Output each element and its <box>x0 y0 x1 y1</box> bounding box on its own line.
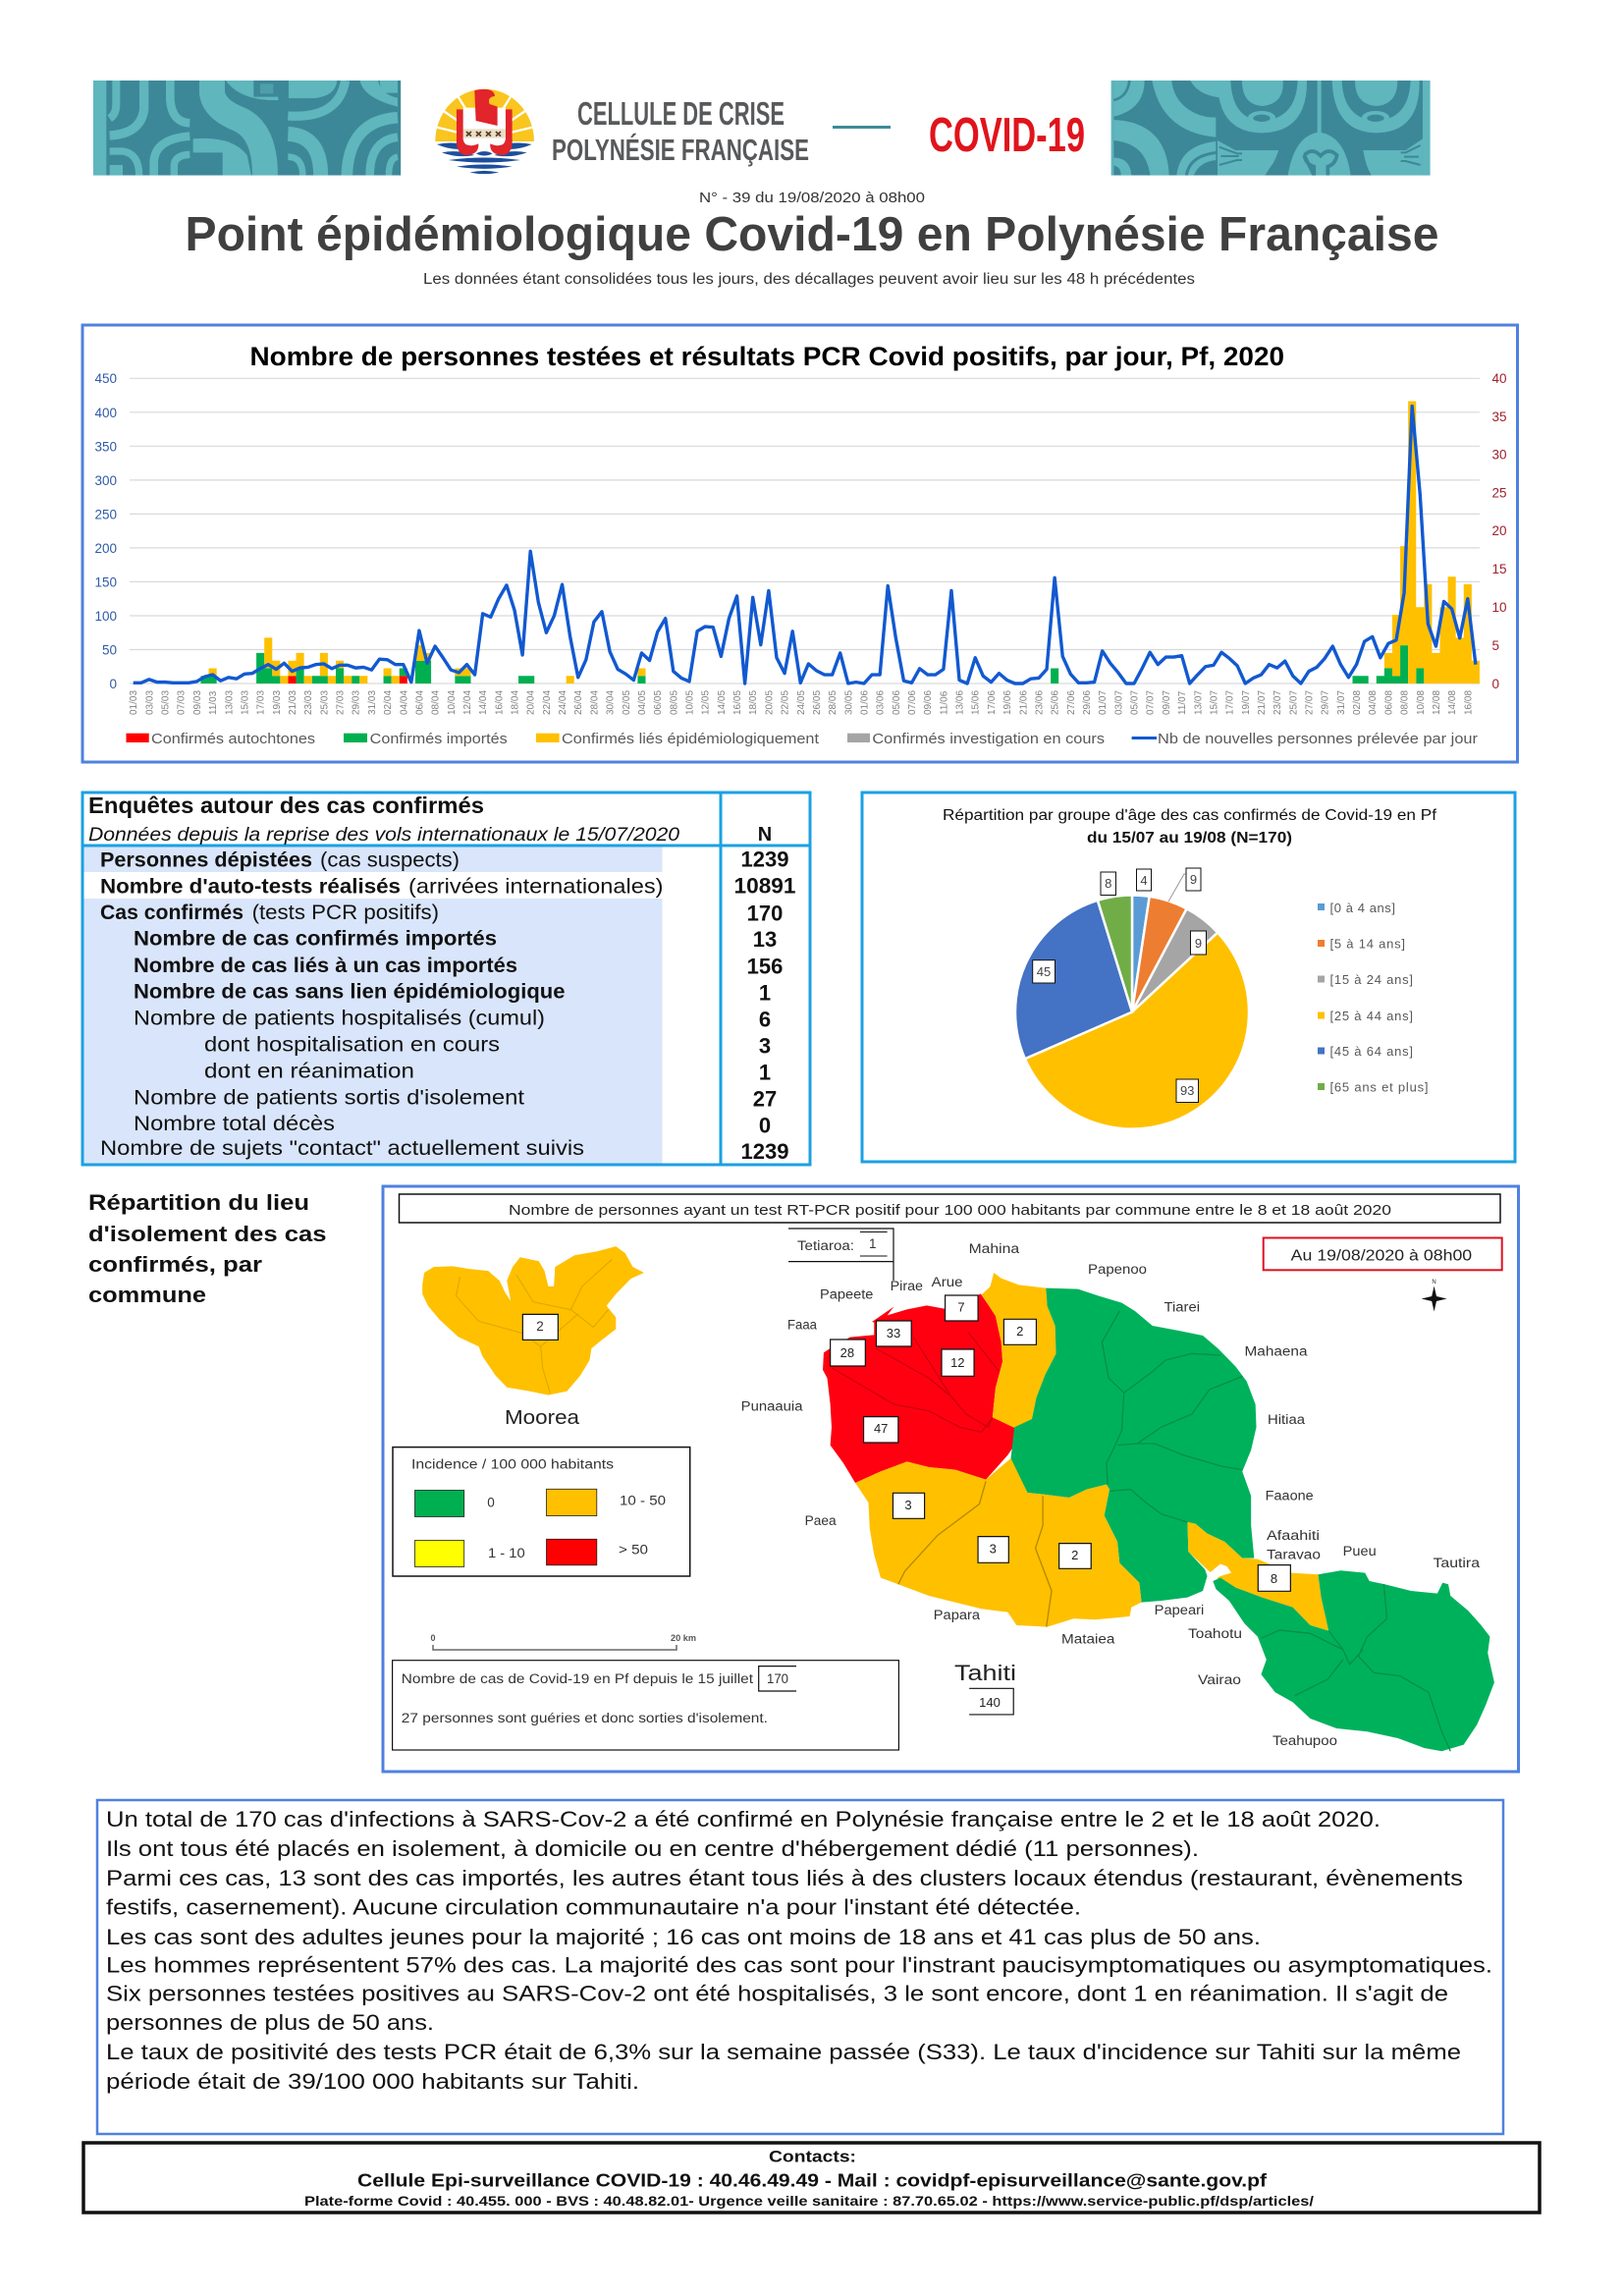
right axis labels: 15 <box>1492 562 1507 576</box>
commune names: Pueu <box>1343 1544 1377 1558</box>
table values: 0 <box>759 1113 771 1137</box>
x axis date labels: 09/03 <box>192 690 203 715</box>
x axis date labels: 08/05 <box>669 690 679 715</box>
commune names: Papara <box>934 1608 981 1622</box>
case count box: Nombre de cas de Covid-19 en Pf depuis le 15 juillet <box>402 1671 753 1686</box>
x axis date labels: 23/07 <box>1272 690 1283 715</box>
table values: 170 <box>747 901 783 925</box>
left axis labels: 200 <box>94 541 117 556</box>
table row labels: Personnes dépistées <box>100 849 312 872</box>
panel: narrative text: personnes de plus de 50 ans. <box>106 2010 434 2035</box>
left axis labels: 300 <box>94 473 117 488</box>
table values: 6 <box>759 1007 771 1031</box>
x axis date labels: 09/07 <box>1162 690 1172 715</box>
commune names: Afaahiti <box>1267 1528 1320 1543</box>
x axis date labels: 24/05 <box>796 690 807 715</box>
table row labels: (cas suspects) <box>320 849 460 872</box>
x axis date labels: 27/07 <box>1304 690 1316 715</box>
chart legend <box>126 732 1478 747</box>
x axis date labels: 15/03 <box>240 690 251 715</box>
panel: age group pie chart <box>862 793 1515 1162</box>
date stamp: Au 19/08/2020 à 08h00 <box>1291 1247 1473 1264</box>
table values: 27 <box>753 1087 777 1112</box>
table heading: N <box>758 824 772 846</box>
x axis date labels: 07/06 <box>907 690 918 715</box>
heading: isolation place by commune: d'isolement des cas <box>88 1222 326 1246</box>
commune names: Vairao <box>1198 1672 1241 1687</box>
x axis date labels: 22/05 <box>781 690 791 715</box>
left axis labels: 150 <box>94 575 117 589</box>
x axis date labels: 31/03 <box>367 690 378 715</box>
pie title: du 15/07 au 19/08 (N=170) <box>1087 830 1292 847</box>
x axis date labels: 13/06 <box>955 690 966 715</box>
pie legend: [0 à 4 ans] <box>1329 901 1395 915</box>
x axis date labels: 13/03 <box>224 690 235 715</box>
panel: narrative text: Parmi ces cas, 13 sont des cas importés, les autres étant tous liés à des clusters locaux étendus (restaurant, évènements <box>106 1866 1463 1890</box>
commune names: Tautira <box>1434 1556 1481 1570</box>
stacked bars of confirmed cases <box>200 402 1480 683</box>
x axis date labels: 02/08 <box>1352 690 1363 715</box>
x axis date labels: 09/06 <box>923 690 934 715</box>
commune count values: 7 <box>957 1300 965 1315</box>
Tahiti label: Tahiti <box>954 1661 1016 1685</box>
heading: isolation place by commune: confirmés, par <box>88 1252 263 1277</box>
x axis date labels: 23/03 <box>303 690 314 715</box>
heading: isolation place by commune <box>88 1190 326 1307</box>
header text: COVID-19: COVID-19 <box>929 109 1085 162</box>
x axis date labels: 05/03 <box>161 690 172 715</box>
x axis date labels: 05/06 <box>892 690 902 715</box>
Tetiaroa box <box>788 1229 893 1281</box>
heading: isolation place by commune: Répartition du lieu <box>88 1190 309 1215</box>
commune count values: 12 <box>950 1355 965 1370</box>
panel: incidence map <box>383 1186 1518 1772</box>
table row labels <box>100 849 664 1160</box>
table row labels: Nombre de cas confirmés importés <box>134 928 497 951</box>
commune names <box>741 1241 1481 1748</box>
incidence legend <box>393 1448 690 1576</box>
x axis date labels: 16/05 <box>732 690 743 715</box>
panel: contacts footer: Cellule Epi-surveillance COVID-19 : 40.46.49.49 - Mail : covidpf-episurveillance@sante.gov.pf <box>357 2171 1268 2191</box>
commune names: Paea <box>805 1513 837 1528</box>
right axis labels: 35 <box>1492 410 1507 424</box>
x axis date labels: 14/08 <box>1447 690 1458 715</box>
header banner: left polynesian pattern <box>93 81 401 176</box>
panel: narrative text <box>97 1800 1503 2134</box>
x axis date labels: 01/03 <box>129 690 139 715</box>
Moorea count: 2 <box>536 1319 544 1334</box>
table row labels: Nombre de patients hospitalisés (cumul) <box>134 1007 545 1029</box>
x axis date labels: 03/06 <box>876 690 887 715</box>
x axis date labels: 07/07 <box>1146 690 1157 715</box>
icon: compass star <box>1422 1280 1447 1312</box>
x axis date labels: 14/05 <box>717 690 728 715</box>
table row labels: (tests PCR positifs) <box>252 902 439 924</box>
table heading: Données depuis la reprise des vols internationaux le 15/07/2020 <box>88 825 679 846</box>
map: Tahiti communes <box>823 1273 1494 1751</box>
icon: compass star: N <box>1432 1280 1436 1285</box>
title: Point épidémiologique Covid-19 en Polynésie Française <box>185 208 1439 261</box>
x axis date labels: 01/06 <box>860 690 870 715</box>
right axis labels: 0 <box>1492 677 1499 691</box>
table row labels: Nombre de cas sans lien épidémiologique <box>134 981 566 1004</box>
x axis date labels: 28/04 <box>589 690 600 715</box>
x axis date labels: 17/03 <box>256 690 267 715</box>
x axis date labels: 18/04 <box>511 690 520 715</box>
right axis labels <box>1492 371 1507 691</box>
commune names: Faaa <box>787 1317 817 1332</box>
x axis date labels: 31/07 <box>1336 690 1347 715</box>
commune count values: 2 <box>1071 1548 1078 1562</box>
commune names: Taravao <box>1267 1548 1321 1561</box>
heading: isolation place by commune: commune <box>88 1283 206 1307</box>
x axis date labels: 10/04 <box>447 690 458 715</box>
left axis labels: 50 <box>102 642 117 658</box>
case count box: 27 personnes sont guéries et donc sorties d'isolement. <box>402 1711 768 1725</box>
panel: contacts footer: Contacts: <box>769 2148 856 2166</box>
x axis date labels: 16/04 <box>494 690 505 715</box>
commune count values: 3 <box>990 1542 997 1556</box>
x axis date labels: 21/07 <box>1257 690 1268 715</box>
pie data labels: 45 <box>1037 964 1051 979</box>
table row labels: Nombre total décès <box>134 1113 335 1135</box>
panel: narrative text: Les hommes représentent 57% des cas. La majorité des cas sont pour l'instrant paucisymptomatiques ou asymptomatiques. <box>106 1952 1492 1978</box>
x axis date labels: 06/05 <box>653 690 664 715</box>
pie legend: [5 à 14 ans] <box>1329 937 1405 951</box>
table values: 1 <box>759 980 771 1005</box>
commune names: Mataiea <box>1061 1632 1115 1647</box>
panel: narrative text: Six personnes testées positives au SARS-Cov-2 ont été hospitalisés, 3 le sont encore, dont 1 en réanimation. Il s'agit de <box>106 1982 1448 2005</box>
pie legend: [45 à 64 ans] <box>1329 1044 1413 1059</box>
commune count values: 47 <box>874 1421 888 1436</box>
commune count values: 3 <box>904 1498 912 1512</box>
x axis date labels: 30/04 <box>606 690 617 715</box>
x axis date labels: 03/07 <box>1113 690 1124 715</box>
commune names: Toahotu <box>1188 1626 1242 1641</box>
x axis date labels: 22/04 <box>542 690 553 715</box>
x axis date labels: 19/03 <box>272 690 283 715</box>
incidence legend: 10 - 50 <box>620 1493 666 1508</box>
case count box <box>393 1661 898 1750</box>
x axis date labels: 15/07 <box>1209 690 1219 715</box>
scale bar <box>430 1633 696 1650</box>
map: Moorea <box>422 1246 644 1395</box>
commune names: Teahupoo <box>1272 1733 1337 1748</box>
x axis date labels: 24/04 <box>558 690 568 715</box>
x axis date labels: 25/06 <box>1051 690 1061 715</box>
panel: narrative text: période était de 39/100 000 habitants sur Tahiti. <box>106 2069 639 2094</box>
case count box: 170 <box>767 1671 788 1686</box>
table row labels: Nombre de sujets "contact" actuellement suivis <box>100 1137 584 1160</box>
pie data labels <box>1033 868 1206 1102</box>
commune names: Papeete <box>820 1287 873 1302</box>
commune count values: 2 <box>1016 1324 1023 1339</box>
commune names: Faaone <box>1266 1488 1314 1503</box>
table values: 3 <box>759 1033 771 1058</box>
x axis date labels: 25/07 <box>1288 690 1299 715</box>
commune count values: 28 <box>840 1345 854 1360</box>
x axis date labels: 12/08 <box>1432 690 1442 715</box>
left axis labels: 350 <box>94 440 117 454</box>
header banner: right polynesian pattern <box>1111 81 1431 176</box>
commune count values: 140 <box>979 1695 1001 1710</box>
panel: narrative text: Un total de 170 cas d'infections à SARS-Cov-2 a été confirmé en Polynésie française entre le 2 et le 18 août 2020. <box>106 1807 1380 1831</box>
logo: emblem of French Polynesia <box>435 89 534 174</box>
x axis date labels: 06/08 <box>1383 690 1394 715</box>
x axis date labels: 27/03 <box>336 690 346 715</box>
scale bar: 20 km <box>671 1633 696 1643</box>
right axis labels: 20 <box>1492 523 1507 538</box>
x axis date labels: 23/06 <box>1035 690 1045 715</box>
x axis date labels: 30/05 <box>843 690 854 715</box>
pie data labels: 4 <box>1140 873 1148 888</box>
incidence legend: 1 - 10 <box>488 1546 525 1560</box>
incidence legend: > 50 <box>619 1543 648 1558</box>
table values <box>734 847 795 1164</box>
table row labels: dont hospitalisation en cours <box>204 1034 500 1057</box>
commune names: Mahaena <box>1245 1343 1308 1358</box>
panel: daily tests and positive PCR chart <box>82 325 1518 762</box>
left axis labels: 250 <box>94 507 117 522</box>
right axis labels: 30 <box>1492 448 1507 462</box>
table heading: Enquêtes autour des cas confirmés <box>88 793 484 818</box>
Tetiaroa box: Tetiaroa: <box>797 1238 854 1253</box>
x axis date labels: 05/07 <box>1129 690 1141 715</box>
x axis date labels: 11/03 <box>208 690 219 715</box>
x axis date labels: 01/07 <box>1098 690 1109 715</box>
pie data labels: 9 <box>1190 872 1197 887</box>
table row labels: Nombre de patients sortis d'isolement <box>134 1086 524 1109</box>
gridlines <box>130 378 1480 683</box>
commune names: Pirae <box>891 1279 923 1293</box>
x axis date labels: 26/04 <box>573 690 584 715</box>
pie title <box>943 807 1437 847</box>
pie data labels: 9 <box>1195 936 1202 951</box>
table values: 1239 <box>741 1139 788 1164</box>
x axis date labels <box>129 690 1474 715</box>
commune count boxes <box>831 1295 1290 1591</box>
commune count values: 8 <box>1271 1571 1277 1586</box>
left axis labels: 400 <box>94 406 117 420</box>
x axis date labels: 29/06 <box>1082 690 1093 715</box>
incidence legend: 0 <box>487 1495 495 1510</box>
x axis date labels: 04/04 <box>399 690 409 715</box>
table values: 156 <box>747 954 783 978</box>
commune names: Papenoo <box>1088 1262 1147 1277</box>
table values: 13 <box>753 927 777 952</box>
header text: cellule de crise <box>552 95 891 167</box>
map title box <box>399 1194 1500 1223</box>
panel: narrative text: Les cas sont des adultes jeunes pour la majorité ; 16 cas ont moins de 18 ans et 41 cas plus de 50 ans. <box>106 1925 1261 1949</box>
commune names: Arue <box>932 1275 962 1289</box>
commune names: Hitiaa <box>1268 1412 1306 1427</box>
left axis labels <box>94 371 117 691</box>
x axis date labels: 17/06 <box>987 690 998 715</box>
x axis date labels: 04/05 <box>637 690 648 715</box>
header text: cellule de crise: CELLULE DE CRISE <box>577 95 785 132</box>
x axis date labels: 29/03 <box>352 690 362 715</box>
x axis date labels: 15/06 <box>971 690 982 715</box>
x axis date labels: 26/05 <box>812 690 823 715</box>
table values: 10891 <box>734 873 795 898</box>
pie legend: [15 à 24 ans] <box>1329 972 1413 987</box>
x axis date labels: 14/04 <box>478 690 489 715</box>
right axis labels: 25 <box>1492 485 1507 501</box>
subtitle note: Les données étant consolidées tous les jours, des décallages peuvent avoir lieu sur les 48 h précédentes <box>423 271 1195 288</box>
panel: narrative text: festifs, casernement). Aucune circulation communautaire n'a pour l'instant été détectée. <box>106 1895 1081 1919</box>
x axis date labels: 20/04 <box>526 690 537 715</box>
x axis date labels: 12/05 <box>701 690 712 715</box>
chart legend: Confirmés investigation en cours <box>872 732 1105 747</box>
x axis date labels: 25/03 <box>319 690 330 715</box>
Tetiaroa box: 1 <box>869 1236 876 1251</box>
x axis date labels: 12/04 <box>462 690 473 715</box>
chart legend: Nb de nouvelles personnes prélevée par jour <box>1158 732 1478 747</box>
panel: narrative text: Le taux de positivité des tests PCR était de 6,3% sur la semaine passée (S33). Le taux d'incidence sur Tahiti sur la même <box>106 2040 1461 2064</box>
commune count values <box>840 1300 1277 1710</box>
x axis date labels: 08/04 <box>431 690 442 715</box>
commune count values: 33 <box>887 1326 900 1340</box>
table row labels: Nombre de cas liés à un cas importés <box>134 955 517 977</box>
line: new persons sampled per day <box>134 407 1476 683</box>
bulletin number: N° - 39 du 19/08/2020 à 08h00 <box>699 190 925 206</box>
x axis date labels: 07/03 <box>177 690 188 715</box>
x axis date labels: 19/07 <box>1241 690 1252 715</box>
chart legend: Confirmés liés épidémiologiquement <box>562 732 819 747</box>
pie legend: [65 ans et plus] <box>1329 1080 1428 1094</box>
x axis date labels: 19/06 <box>1002 690 1013 715</box>
pie legend <box>1318 901 1428 1094</box>
right axis labels: 40 <box>1492 371 1507 386</box>
x axis date labels: 16/08 <box>1463 690 1474 715</box>
x axis date labels: 10/08 <box>1416 690 1427 715</box>
table row labels: Cas confirmés <box>100 902 244 924</box>
table heading <box>88 793 772 846</box>
pie legend: [25 à 44 ans] <box>1329 1009 1413 1023</box>
chart title: Nombre de personnes testées et résultats PCR Covid positifs, par jour, Pf, 2020 <box>249 342 1284 371</box>
pie title: Répartition par groupe d'âge des cas confirmés de Covid-19 en Pf <box>943 807 1437 824</box>
x axis date labels: 28/05 <box>828 690 839 715</box>
x axis date labels: 11/07 <box>1177 690 1188 715</box>
table row labels: Nombre d'auto-tests réalisés <box>100 875 401 898</box>
commune names: Tiarei <box>1164 1300 1200 1315</box>
x axis date labels: 21/03 <box>288 690 298 715</box>
x axis date labels: 27/06 <box>1066 690 1077 715</box>
commune names: Papeari <box>1155 1603 1204 1617</box>
left axis labels: 0 <box>109 677 117 691</box>
x axis date labels: 17/07 <box>1225 690 1236 715</box>
right axis labels: 5 <box>1492 638 1499 653</box>
x axis date labels: 13/07 <box>1193 690 1204 715</box>
left axis labels: 450 <box>94 371 117 386</box>
x axis date labels: 06/04 <box>414 690 425 715</box>
left axis labels: 100 <box>94 609 117 624</box>
x axis date labels: 02/04 <box>383 690 394 715</box>
x axis date labels: 02/05 <box>622 690 632 715</box>
table row labels: (arrivées internationales) <box>408 875 664 898</box>
incidence legend: Incidence / 100 000 habitants <box>411 1457 614 1472</box>
x axis date labels: 10/05 <box>685 690 695 715</box>
x axis date labels: 03/03 <box>144 690 155 715</box>
x axis date labels: 18/05 <box>748 690 759 715</box>
panel: narrative text: Ils ont tous été placés en isolement, à domicile ou en centre d'hébergement dédié (11 personnes). <box>106 1836 1199 1861</box>
pie data labels: 8 <box>1105 876 1111 891</box>
panel: contacts footer <box>83 2143 1540 2213</box>
commune names: Mahina <box>969 1241 1020 1256</box>
header text: cellule de crise: POLYNÉSIE FRANÇAISE <box>552 133 809 167</box>
Moorea label: Moorea <box>505 1407 580 1429</box>
pie data labels: 93 <box>1180 1083 1194 1098</box>
x axis date labels: 08/08 <box>1400 690 1411 715</box>
map title box: Nombre de personnes ayant un test RT-PCR positif pour 100 000 habitants par commune entre le 8 et 18 août 2020 <box>509 1203 1391 1219</box>
x axis date labels: 21/06 <box>1018 690 1029 715</box>
date stamp <box>1264 1237 1502 1270</box>
x axis date labels: 20/05 <box>764 690 775 715</box>
scale bar: 0 <box>430 1633 436 1643</box>
x axis date labels: 04/08 <box>1368 690 1379 715</box>
table values: 1239 <box>741 847 788 872</box>
panel: investigations table <box>82 793 810 1165</box>
table values: 1 <box>759 1060 771 1084</box>
x axis date labels: 29/07 <box>1321 690 1331 715</box>
chart legend: Confirmés autochtones <box>151 732 315 747</box>
panel: contacts footer: Plate-forme Covid : 40.455. 000 - BVS : 40.48.82.01- Urgence veille sanitaire : 87.70.65.02 - https://www.service-public.pf/dsp/articles/ <box>304 2193 1314 2209</box>
pie slices <box>1015 895 1249 1129</box>
table row labels: dont en réanimation <box>204 1061 414 1083</box>
right axis labels: 10 <box>1492 600 1507 615</box>
commune names: Punaauia <box>741 1398 803 1413</box>
x axis date labels: 11/06 <box>939 690 949 715</box>
chart legend: Confirmés importés <box>370 732 508 747</box>
